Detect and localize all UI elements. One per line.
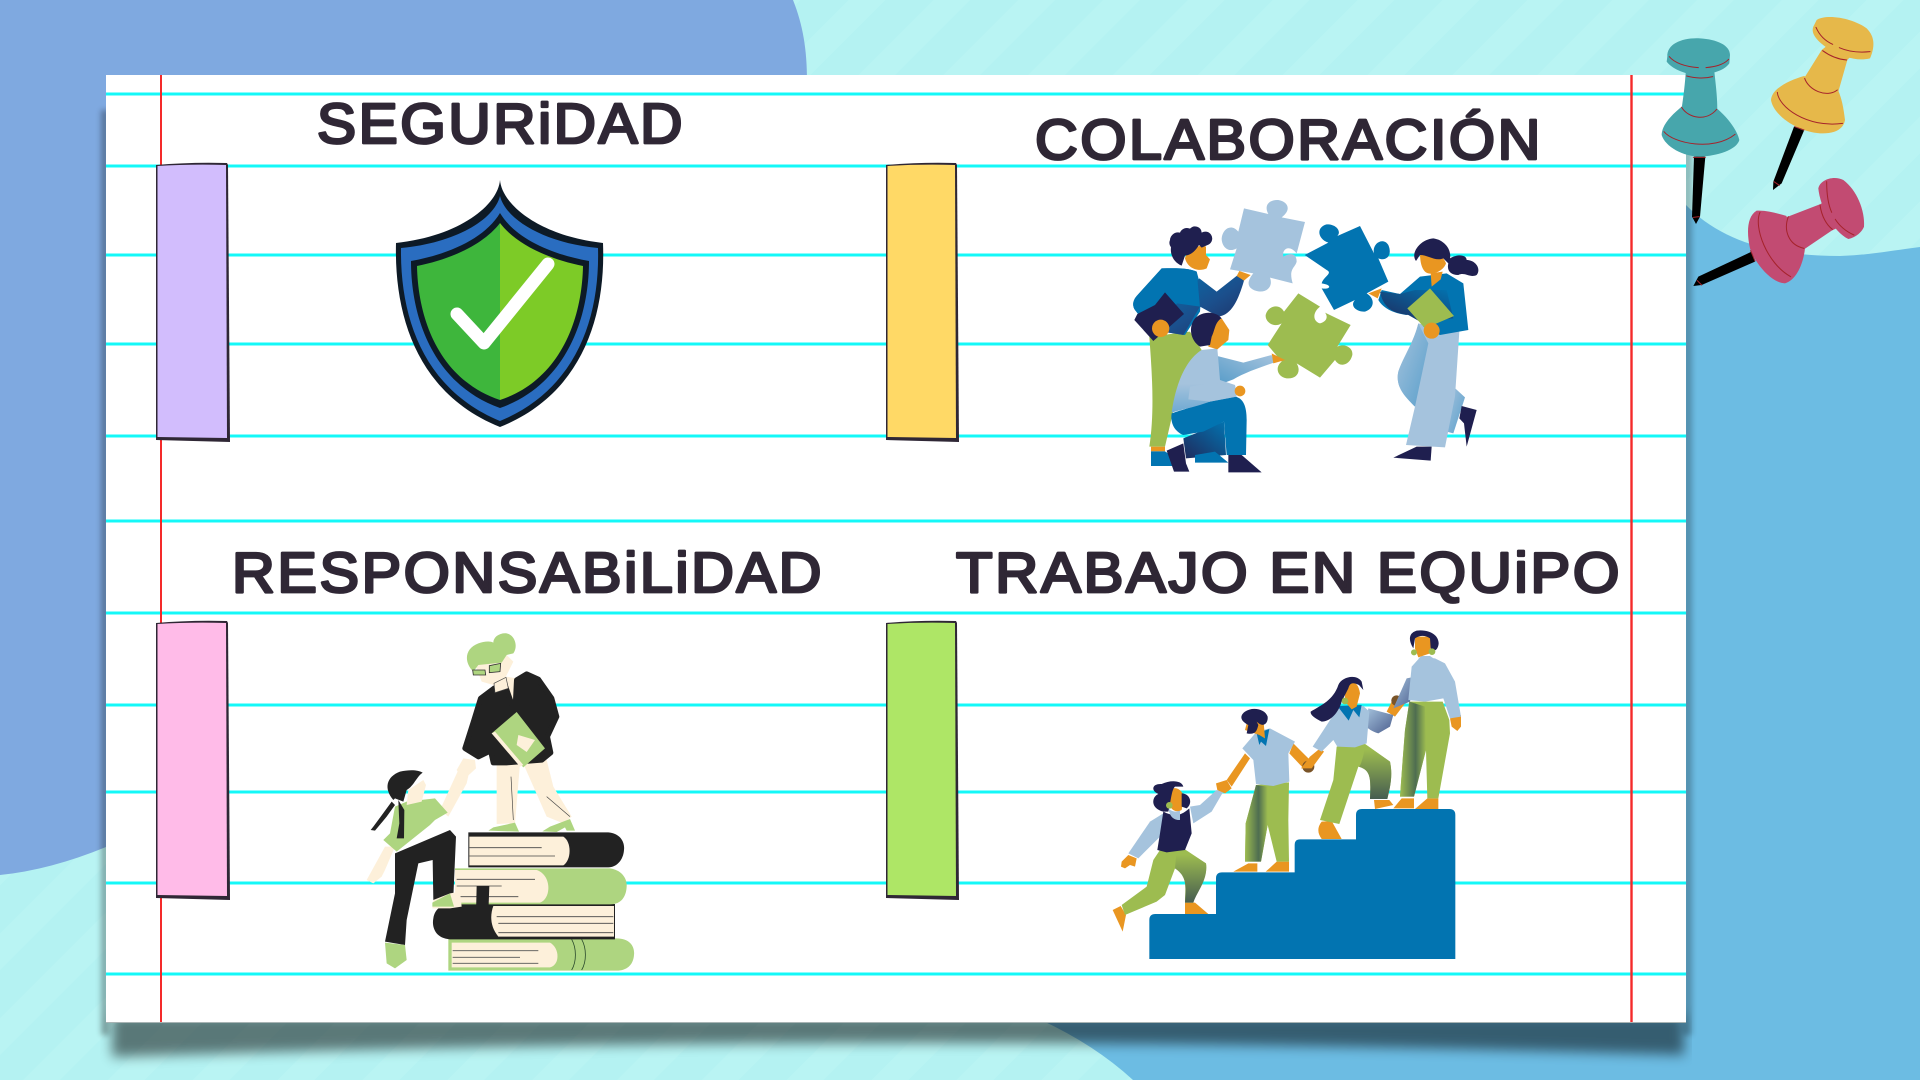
puzzle piece: light blue (1222, 200, 1305, 292)
puzzle piece: green (1266, 293, 1352, 378)
sticky tab: pink (156, 621, 230, 900)
person: kneeling man (1167, 313, 1285, 472)
panel: trabajo en equipo (886, 541, 1622, 959)
pins (1662, 17, 1873, 286)
illustration: team solving puzzle (1133, 200, 1478, 472)
stairs (1149, 809, 1455, 959)
heading: responsabilidad: RESPONSABiLiDAD (232, 541, 824, 605)
icon: shield with check (396, 180, 603, 427)
puzzle piece: blue (1305, 224, 1390, 312)
person: woman in navy vest (1113, 780, 1232, 932)
sticky tab: yellow (886, 163, 959, 442)
person: long-haired woman (1301, 677, 1405, 839)
illustration: woman helping girl on books (367, 633, 634, 971)
panel: colaboracion (886, 108, 1543, 472)
panel: seguridad (156, 92, 685, 442)
illustration: team climbing stairs (1113, 630, 1461, 959)
person: climbing girl (367, 768, 470, 968)
icon: teal pin (1662, 38, 1739, 224)
heading: trabajo en equipo: TRABAJO EN EQUiPO (956, 541, 1622, 605)
heading: seguridad: SEGURiDAD (317, 92, 685, 156)
icon: pink pin (1693, 178, 1864, 286)
books stack (433, 832, 634, 971)
person: standing man (1133, 226, 1251, 466)
icon: yellow pin (1771, 17, 1873, 190)
sticky tab: purple (156, 163, 230, 442)
notebook paper (106, 75, 1686, 1023)
person: man at top (1393, 630, 1461, 809)
paper shadow (101, 110, 1692, 1057)
person: woman with folder (1368, 238, 1478, 461)
sticky tab: green (886, 621, 959, 900)
person: bearded man (1227, 709, 1314, 872)
person: woman with glasses (457, 633, 575, 832)
heading: colaboracion: COLABORACIÓN (1035, 108, 1543, 172)
panel: responsabilidad (156, 541, 824, 971)
